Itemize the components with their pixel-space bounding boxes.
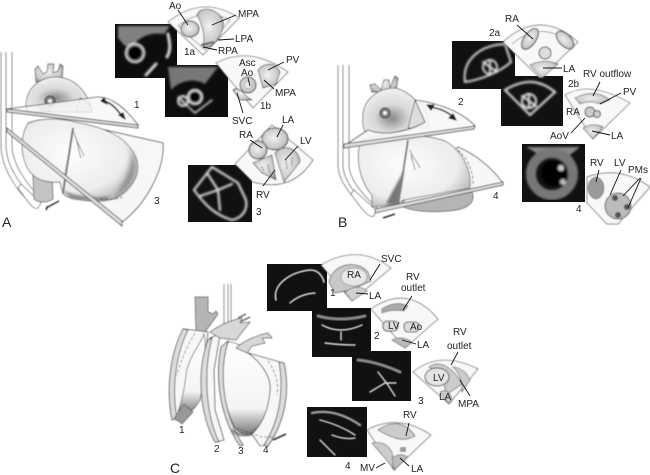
labels A: Ao (169, 1, 182, 12)
labels A: LPA (235, 34, 253, 45)
labels B: AoV (550, 131, 569, 142)
ultrasound 3 A (188, 165, 252, 222)
plane 4 C (236, 353, 287, 446)
ultrasound 4 C (307, 407, 367, 457)
labels B: 4 (576, 204, 582, 215)
labels B: 2 (458, 97, 464, 108)
catheter C (224, 284, 231, 330)
labels A: A (2, 214, 12, 230)
labels A: MPA (238, 9, 259, 20)
anatomical fan 2b (565, 89, 630, 139)
labels A: 1a (184, 47, 196, 58)
labels C: LV (388, 321, 400, 332)
anatomical fan 1a (168, 7, 239, 55)
panel A heart diagram (1, 52, 163, 226)
labels C: LA (369, 291, 382, 302)
arrow A (104, 101, 123, 118)
labels C: 2 (374, 331, 380, 342)
labels B: PMs (628, 165, 648, 176)
ultrasound 4 B (522, 144, 585, 202)
labels B (338, 14, 648, 230)
labels C: LA (411, 464, 424, 475)
labels C: outlet (401, 283, 426, 294)
anatomical fan 2 C (371, 298, 438, 348)
ultrasound 2 B (452, 41, 515, 89)
heart B (358, 76, 473, 212)
labels C: LA (417, 340, 430, 351)
plane 4 B (375, 182, 503, 213)
labels A: RPA (218, 46, 238, 57)
ultrasound 2 C (312, 308, 371, 357)
ultrasound 3 C (352, 351, 411, 401)
labels B: RA (566, 107, 580, 118)
labels C: LA (439, 392, 452, 403)
labels A: 3 (256, 207, 262, 218)
probe B (383, 214, 395, 218)
labels B: 4 (493, 191, 499, 202)
labels B: PV (623, 87, 637, 98)
labels C: outlet (447, 341, 472, 352)
labels C: SVC (381, 254, 402, 265)
anatomical fan 4 C (367, 423, 431, 470)
labels C: RV (453, 327, 467, 338)
catheter B (338, 65, 378, 216)
labels C: 4 (345, 461, 351, 472)
labels C: RA (347, 270, 361, 281)
labels A: LV (300, 136, 312, 147)
labels C: 3 (238, 446, 244, 457)
labels C: 4 (263, 445, 269, 456)
labels A (2, 1, 312, 230)
labels B: 2b (568, 79, 580, 90)
labels A: 1b (260, 101, 272, 112)
plane 2 B (344, 100, 475, 146)
panel B heart diagram (338, 65, 503, 218)
anatomical fan 1 C (321, 255, 391, 301)
labels C: LV (433, 373, 445, 384)
plane 1 A (7, 97, 138, 125)
labels C: 2 (214, 444, 220, 455)
panel B (338, 14, 650, 230)
probe C (273, 434, 286, 440)
plane 2 C (201, 314, 250, 442)
labels C: 1 (330, 288, 336, 299)
labels C: MV (360, 463, 375, 474)
labels C: RV (406, 272, 420, 283)
labels A: Ao (241, 68, 254, 79)
labels A: MPA (275, 88, 296, 99)
ultrasound 1a (115, 24, 177, 78)
labels C: Ao (410, 322, 423, 333)
labels A: Asc (239, 58, 256, 69)
vessels C (195, 297, 218, 332)
plane 3 A back (70, 122, 163, 222)
labels C: 3 (418, 396, 424, 407)
labels A: RA (239, 130, 253, 141)
labels A: LA (282, 115, 295, 126)
labels C: MPA (458, 399, 479, 410)
catheter A (1, 52, 41, 205)
ultrasound 1 C (267, 264, 327, 311)
labels B: RV (590, 158, 604, 169)
labels B: RV outflow (583, 69, 632, 80)
labels B: LA (611, 131, 624, 142)
plane 1 C (169, 329, 208, 424)
arrow B (430, 107, 454, 118)
ultrasound 1b (165, 65, 228, 117)
labels C (170, 254, 479, 475)
panel C (169, 254, 479, 475)
heart A (22, 64, 138, 202)
anatomical fan 4 B (587, 173, 650, 224)
labels A: 1 (134, 100, 140, 111)
labels B: LA (563, 64, 576, 75)
labels B: B (338, 214, 347, 230)
probe A (46, 201, 59, 210)
anatomical fan 2a (503, 25, 578, 78)
plane 3 A edge (7, 128, 122, 226)
labels B: 2a (489, 28, 501, 39)
labels A: RV (256, 190, 270, 201)
panel A (1, 1, 313, 230)
labels B: RA (505, 14, 519, 25)
labels A: SVC (232, 116, 253, 127)
labels C: RV (403, 410, 417, 421)
panel C heart diagram (169, 284, 287, 446)
labels B: LV (614, 158, 626, 169)
plane 3 and heart C (218, 333, 272, 446)
labels C: 1 (179, 425, 185, 436)
labels A: 3 (154, 196, 160, 207)
plane 4 B back (400, 147, 503, 205)
labels A: PV (286, 55, 300, 66)
ultrasound 2b B (501, 76, 563, 126)
anatomical fan 3 A (235, 125, 313, 185)
anatomical fan 3 C (413, 360, 478, 404)
anatomical fan 1b (216, 56, 288, 108)
